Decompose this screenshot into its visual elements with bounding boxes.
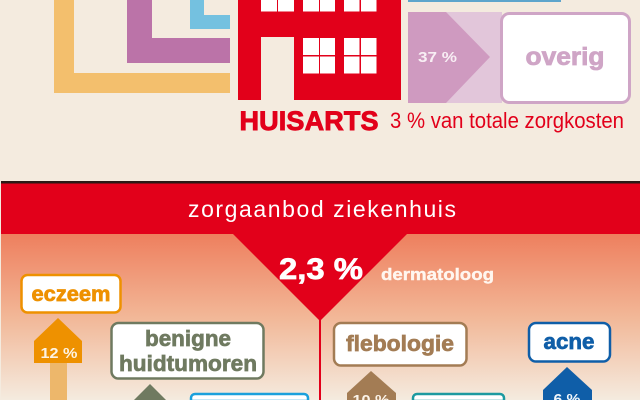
heading: zorgaanbod ziekenhuis: zorgaanbod ziekenhuis (188, 196, 456, 222)
blue L-shaped flow (190, 0, 230, 29)
arrow: flebologie 10 % (347, 371, 396, 400)
box: benigne huidtumoren: huidtumoren (119, 351, 257, 376)
box: acne: acne (544, 329, 594, 354)
arrow: 37 % overig (408, 12, 502, 103)
box: acne (529, 323, 610, 362)
top blue bar (408, 0, 561, 2)
box: flebologie: flebologie (346, 331, 454, 356)
arrow: acne 6 % (543, 367, 592, 400)
purple L-shaped flow (127, 0, 230, 63)
box: benigne huidtumoren (112, 323, 264, 378)
yellow L-shaped flow (54, 0, 230, 93)
box: flebologie (334, 323, 466, 366)
stat: 2,3 %: 2,3 % (279, 253, 363, 286)
panel: zorgaanbod ziekenhuis (1, 181, 640, 400)
box: eczeem: eczeem (32, 283, 110, 306)
box: overig (502, 14, 630, 102)
label: dermatoloog: dermatoloog (381, 265, 494, 284)
text: share of total care costs: 3 % van totale zorgkosten (390, 108, 624, 133)
box: eczeem (22, 275, 120, 312)
box: blue, cropped (191, 394, 308, 400)
arrow: eczeem 12 % (34, 318, 82, 400)
arrow: benigne huidtumoren (134, 384, 166, 400)
heading: huisarts: HUISARTS (240, 106, 378, 136)
arrow: 37 % overig: 37 % (418, 49, 457, 66)
box: teal, cropped (413, 394, 504, 400)
icon: huisarts building (238, 0, 401, 100)
arrow: eczeem 12 %: 12 % (40, 345, 78, 362)
box: benigne huidtumoren: benigne (145, 326, 231, 351)
box: overig: overig (526, 43, 604, 71)
